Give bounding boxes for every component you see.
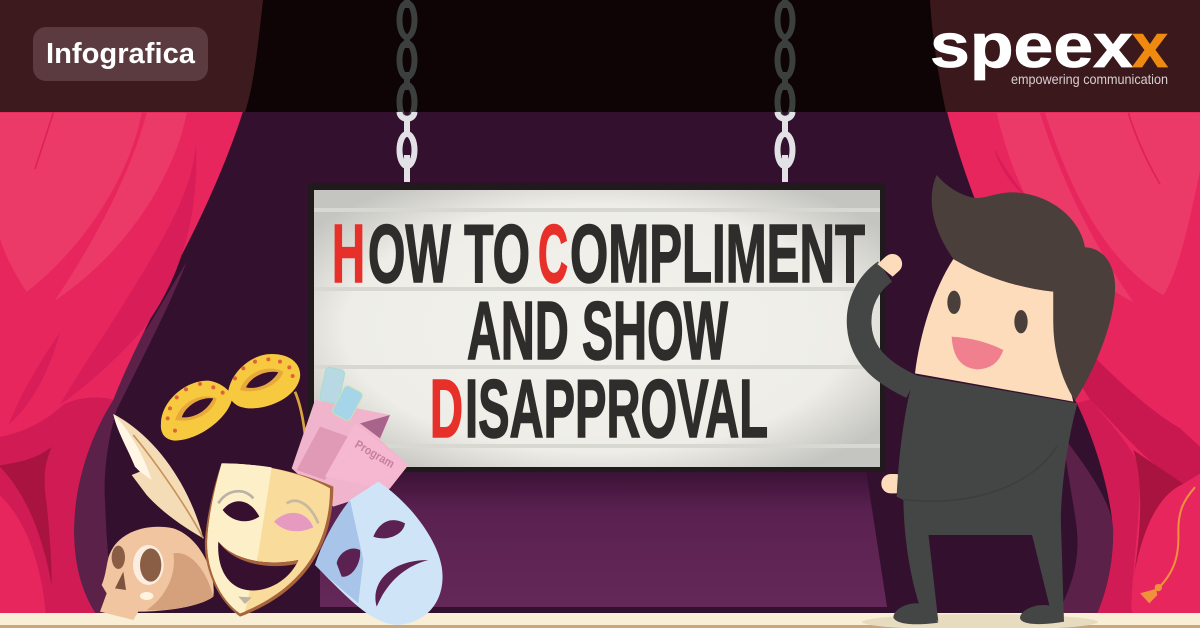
right curtain drape: [947, 110, 1200, 615]
character face: [915, 259, 1073, 402]
right curtain shadow band: [1057, 437, 1113, 615]
right lower drape: [1132, 474, 1200, 615]
stage floor: [0, 613, 1200, 628]
character eyes: [947, 291, 1028, 333]
left curtain shadow band: [67, 262, 187, 615]
character mouth: [952, 337, 1003, 369]
icon: gold masquerade mask: [161, 354, 305, 441]
logo tagline: empowering communication: [1011, 71, 1168, 87]
icon: program booklet: [292, 400, 408, 507]
right curtain: [947, 110, 1200, 615]
sign title: ISAPPROVAL: [465, 362, 768, 455]
left curtain dark streaks: [60, 142, 196, 405]
character raised arm: [859, 272, 912, 387]
sign face: [314, 190, 880, 467]
left hanging chain: [400, 0, 414, 182]
right curtain deep wedge: [1133, 450, 1183, 578]
band right curtain: [930, 0, 1200, 112]
band left curtain: [0, 0, 263, 112]
icon: skull: [100, 527, 214, 620]
right hanging chain: [778, 0, 792, 182]
left curtain fold: [0, 398, 113, 615]
lower purple backdrop panel: [320, 470, 887, 607]
character floor shadow: [862, 614, 1098, 628]
theatre props: [100, 354, 443, 625]
sign: [308, 183, 885, 472]
sign title: OMPLIMENT: [570, 207, 865, 300]
sign title: AND SHOW: [467, 284, 728, 377]
right curtain fold: [1077, 400, 1140, 615]
sign frame: [308, 183, 885, 472]
program label: Program: [352, 437, 397, 471]
badge: Infografica: Infografica: [46, 38, 196, 70]
left curtain: [0, 110, 243, 615]
character torso: [897, 375, 1077, 535]
left curtain highlight folds: [0, 113, 142, 292]
left lower drape: [0, 496, 46, 615]
character feet: [893, 603, 1064, 624]
left curtain deep wedge: [0, 447, 52, 585]
right curtain highlight folds: [1045, 113, 1200, 295]
curtain tassel: [1140, 487, 1195, 603]
character raised hand: [877, 254, 902, 277]
logo: speexx: [930, 12, 1169, 87]
sign title: OW TO: [368, 207, 530, 300]
icon: feather: [113, 414, 203, 538]
sign title: [332, 207, 865, 455]
icon: tragedy mask: [315, 482, 443, 625]
character: presenter: [859, 175, 1115, 624]
character hair: [932, 175, 1115, 401]
logo: speexx: x: [1132, 12, 1169, 81]
character legs: [903, 493, 1064, 622]
left curtain drape: [0, 110, 243, 615]
logo: speexx: speex: [930, 12, 1134, 81]
character lower hand: [881, 474, 905, 493]
icon: tickets: [319, 367, 364, 422]
character ear: [1053, 324, 1071, 342]
sign title: H: [332, 207, 365, 300]
sign title: C: [538, 207, 568, 300]
badge: Infografica: [33, 27, 208, 81]
top dark band: [0, 0, 1200, 112]
sign title: D: [430, 362, 463, 455]
icon: comedy mask: [205, 463, 333, 617]
